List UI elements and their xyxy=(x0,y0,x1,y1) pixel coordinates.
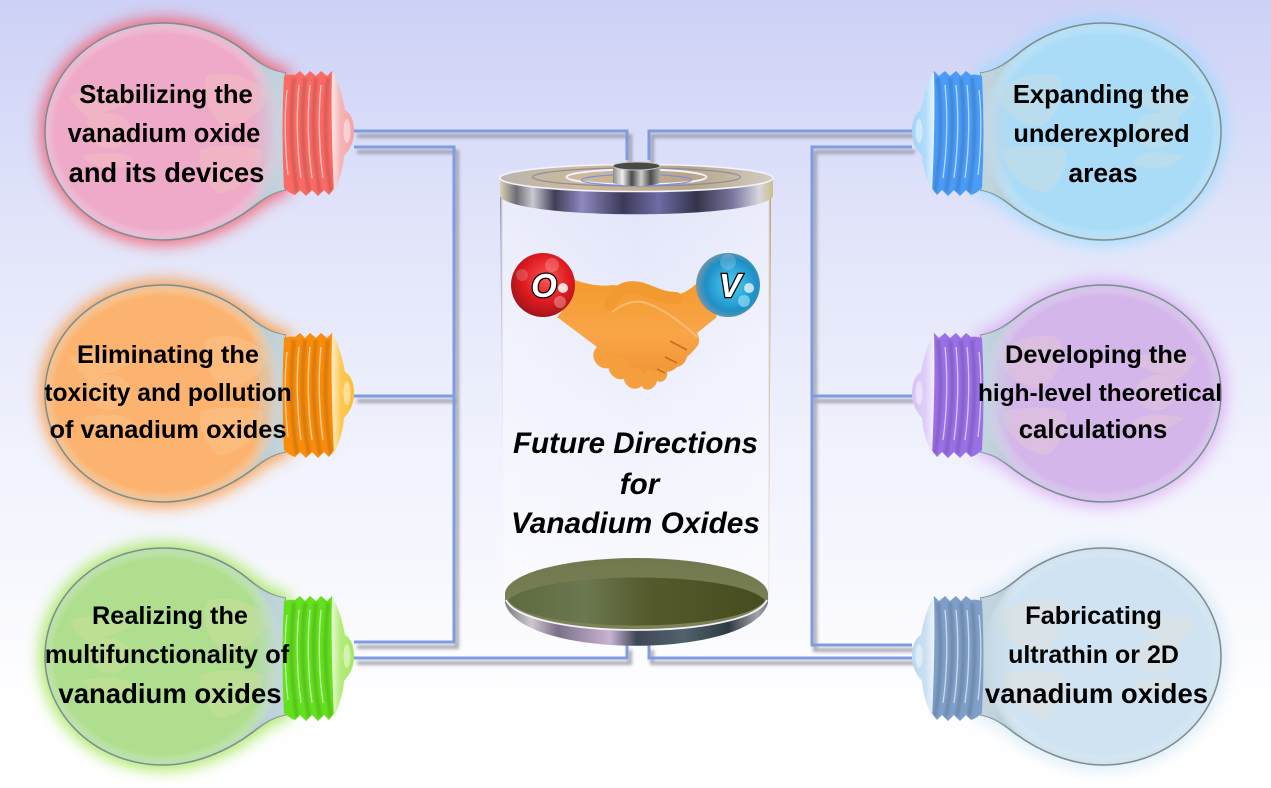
title: Future Directions xyxy=(513,427,758,460)
sub: fingers xyxy=(589,341,669,393)
label: realizing: vanadium oxides xyxy=(58,678,282,709)
label: fabricating: ultrathin or 2D xyxy=(1008,641,1179,669)
label: stabilizing xyxy=(68,81,264,188)
label: eliminating xyxy=(44,341,292,444)
bulb: fabricating xyxy=(912,548,1221,765)
icon: vanadium atom xyxy=(696,253,760,317)
label: developing: high-level theoretical xyxy=(978,380,1222,407)
label: fabricating: Fabricating xyxy=(1025,602,1162,630)
label: expanding: underexplored xyxy=(1013,120,1190,148)
icon: oxygen atom xyxy=(511,253,575,317)
label: eliminating: of vanadium oxides xyxy=(49,416,287,444)
bulb: expanding xyxy=(912,23,1221,240)
label: stabilizing: and its devices xyxy=(69,157,264,188)
label: stabilizing: Stabilizing the xyxy=(79,81,253,109)
bulb: stabilizing xyxy=(45,23,354,240)
label: eliminating: toxicity and pollution xyxy=(44,380,292,407)
label: realizing: Realizing the xyxy=(92,602,248,630)
label: expanding: areas xyxy=(1068,158,1138,188)
bulb: eliminating xyxy=(44,285,354,502)
icon: vanadium atom: V xyxy=(719,267,744,304)
connecting wires xyxy=(354,131,915,663)
title: Vanadium Oxides xyxy=(511,507,760,540)
label: eliminating: Eliminating the xyxy=(77,341,259,369)
bulb: realizing xyxy=(45,548,354,765)
icon: oxygen atom: O xyxy=(531,267,557,304)
battery top cap xyxy=(500,162,773,214)
title xyxy=(511,427,760,540)
bulb: developing xyxy=(912,285,1222,502)
label: fabricating: vanadium oxides xyxy=(985,678,1208,709)
label: developing: Developing the xyxy=(1005,341,1187,369)
label: fabricating xyxy=(985,602,1208,709)
battery xyxy=(500,162,773,646)
title: for xyxy=(620,468,661,501)
battery base xyxy=(505,558,768,646)
label: expanding: Expanding the xyxy=(1013,81,1189,109)
icon: handshake xyxy=(557,279,717,393)
label: realizing xyxy=(45,602,290,709)
label: realizing: multifunctionality of xyxy=(45,641,290,669)
label: developing xyxy=(978,341,1222,444)
label: expanding xyxy=(1013,81,1190,188)
label: developing: calculations xyxy=(1019,416,1167,444)
battery glass body xyxy=(500,197,771,621)
label: stabilizing: vanadium oxide xyxy=(68,120,260,148)
